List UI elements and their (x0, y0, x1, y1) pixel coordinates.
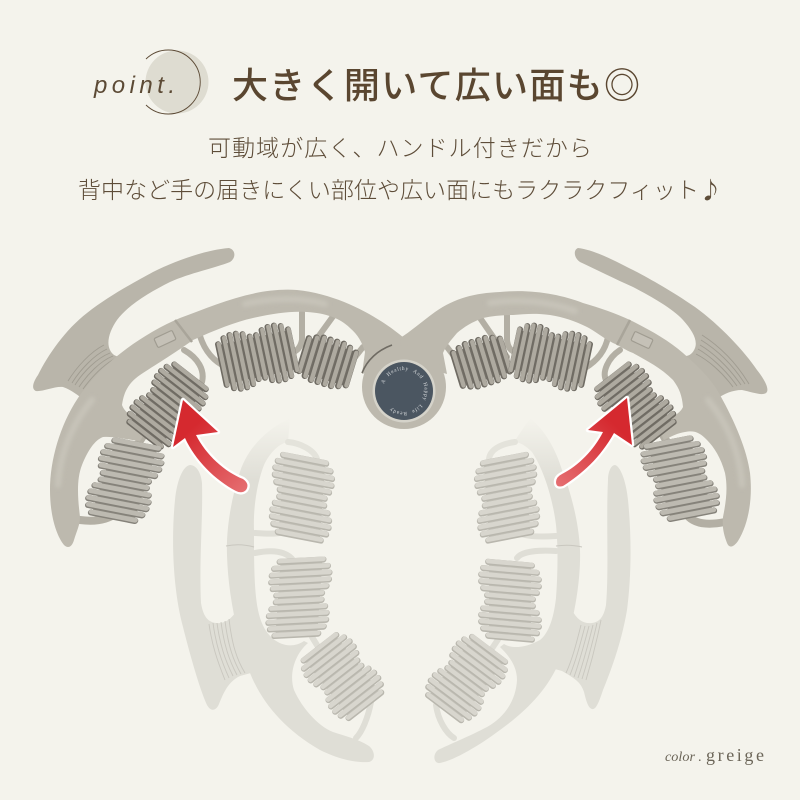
hub ring (372, 360, 436, 422)
right wing ribbed band (696, 335, 749, 387)
color label (665, 745, 764, 765)
color label: . (698, 750, 702, 765)
hub (361, 344, 446, 429)
left hinge (154, 320, 192, 348)
right rollers (451, 323, 721, 520)
ghost ribs right (566, 620, 601, 680)
ghost ribs left (209, 619, 245, 680)
subtitle line 1: 可動域が広く、ハンドル付きだから (208, 135, 592, 161)
ghost wing right (540, 465, 631, 709)
open massager (33, 248, 768, 547)
hub: A Healthy And Happy Life Ready (381, 366, 428, 416)
color label: greige (706, 745, 764, 765)
badge circle (146, 50, 208, 114)
right main arc (400, 291, 751, 547)
ghost rollers left (267, 453, 387, 722)
left arms (80, 312, 363, 521)
badge label: point. (93, 72, 175, 99)
hub crease (362, 345, 392, 373)
red arrow left (173, 400, 247, 492)
subtitle text (78, 135, 722, 205)
left wing handle (33, 248, 234, 400)
color label: color (665, 750, 696, 765)
badge outline arc (146, 50, 200, 114)
faded closed massager left (173, 418, 387, 762)
right arms (447, 312, 725, 524)
point badge (93, 50, 208, 114)
hub disc text (383, 370, 425, 412)
left rollers (84, 323, 358, 522)
ghost hinge ring left (226, 545, 254, 547)
ghost arms right (436, 442, 556, 738)
faded closed massager right (423, 418, 631, 763)
ghost hinge ring right (556, 545, 582, 547)
red arrow right (556, 398, 632, 486)
right wing handle (575, 248, 767, 398)
subtitle line 2: 背中など手の届きにくい部位や広い面にもラクラクフィット♪ (78, 171, 722, 205)
ghost arms left (255, 442, 371, 738)
hub body (362, 345, 446, 429)
ghost arc left (227, 418, 374, 762)
highlights (58, 299, 742, 485)
left wing ribbed band (68, 345, 116, 389)
left main arc (50, 290, 404, 547)
ghost rollers right (423, 453, 539, 724)
right hinge (617, 320, 653, 349)
hub disc (375, 362, 433, 420)
ghost wing left (173, 465, 262, 710)
title: 大きく開いて広い面も◎ (232, 65, 640, 106)
ghost arc right (434, 418, 580, 763)
